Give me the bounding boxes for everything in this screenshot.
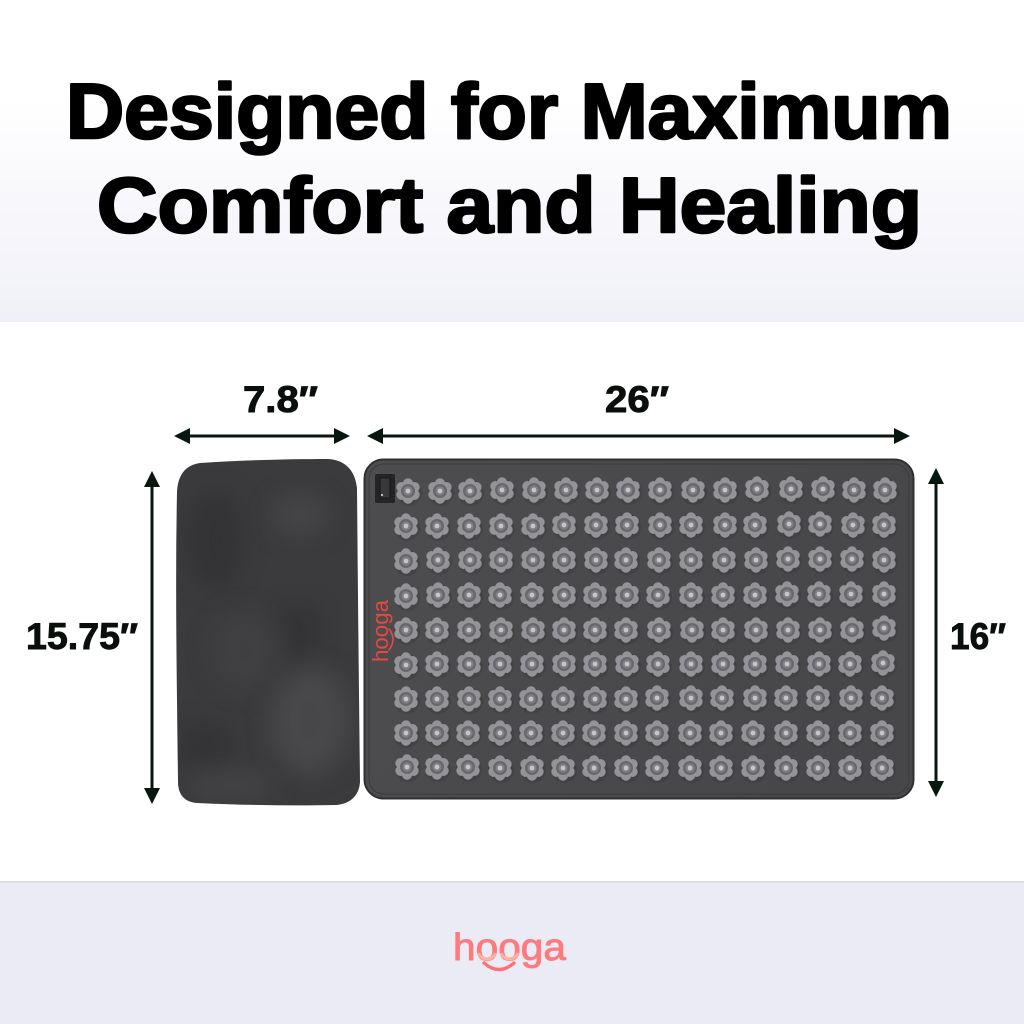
- logo smile: [484, 963, 514, 970]
- red hooga mat logo: hooga: [368, 599, 393, 662]
- label: 7.8 inch width: 7.8″: [243, 379, 318, 420]
- label: 15.75 inch height: 15.75″: [26, 616, 138, 657]
- footer hooga logo: hooga: [453, 927, 567, 969]
- arrow: mat height: [928, 468, 944, 797]
- acupressure flowers grid: [394, 476, 899, 783]
- title: Designed for Maximum: [66, 67, 952, 155]
- arrow: mat width: [367, 428, 910, 444]
- cushion pad: [170, 455, 365, 810]
- footer band: [0, 881, 1024, 1024]
- arrow: cushion width: [174, 428, 350, 444]
- header band: [0, 0, 1024, 322]
- logo peach arcs: [478, 953, 518, 959]
- power switch: [375, 474, 395, 503]
- mat body: [364, 460, 914, 798]
- acupressure mat: [364, 460, 914, 798]
- label: 26 inch width: 26″: [605, 379, 669, 420]
- mat logo smile: [389, 629, 393, 650]
- arrow: cushion height: [144, 471, 160, 804]
- label: 16 inch height: 16″: [950, 616, 1006, 657]
- title: Comfort and Healing: [97, 161, 922, 249]
- mat inner seam: [369, 464, 909, 794]
- title: [66, 67, 952, 249]
